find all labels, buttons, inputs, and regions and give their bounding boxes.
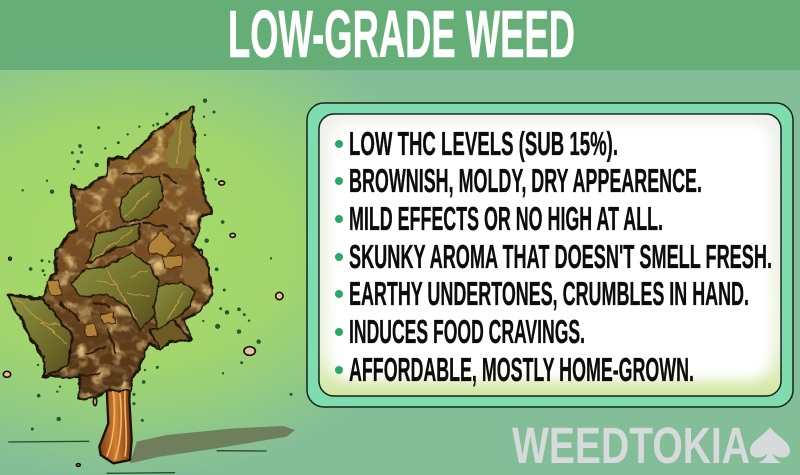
dark creases (60, 173, 193, 377)
list text: INDUCES FOOD CRAVINGS. (349, 314, 585, 351)
panel frame (307, 103, 793, 407)
panel inner card (319, 114, 781, 396)
leaf veins (17, 120, 183, 343)
round lobe right (182, 256, 208, 288)
leaf: middle (87, 223, 140, 263)
list text (349, 126, 772, 389)
bud body (6, 105, 214, 400)
stem (99, 373, 132, 463)
header band (0, 0, 800, 70)
card highlight (328, 122, 772, 380)
leaf: tip (163, 107, 195, 168)
leaf: right (153, 282, 195, 330)
panel: characteristics (307, 103, 793, 407)
leaf: lower right (150, 320, 191, 350)
leaf: far left (8, 295, 73, 377)
icon: spade (750, 427, 790, 463)
bud silhouette (8, 107, 213, 398)
ground shadow (130, 426, 295, 463)
ground lines (8, 441, 267, 473)
ochre clusters (47, 230, 183, 337)
bullets (335, 140, 343, 374)
debris: seeds (3, 181, 283, 466)
leaf: big center (72, 253, 160, 330)
leaf: upper green (118, 177, 163, 222)
debris: specks (22, 99, 292, 430)
brown texture (22, 108, 212, 398)
illustration: dried cannabis bud (0, 90, 295, 473)
